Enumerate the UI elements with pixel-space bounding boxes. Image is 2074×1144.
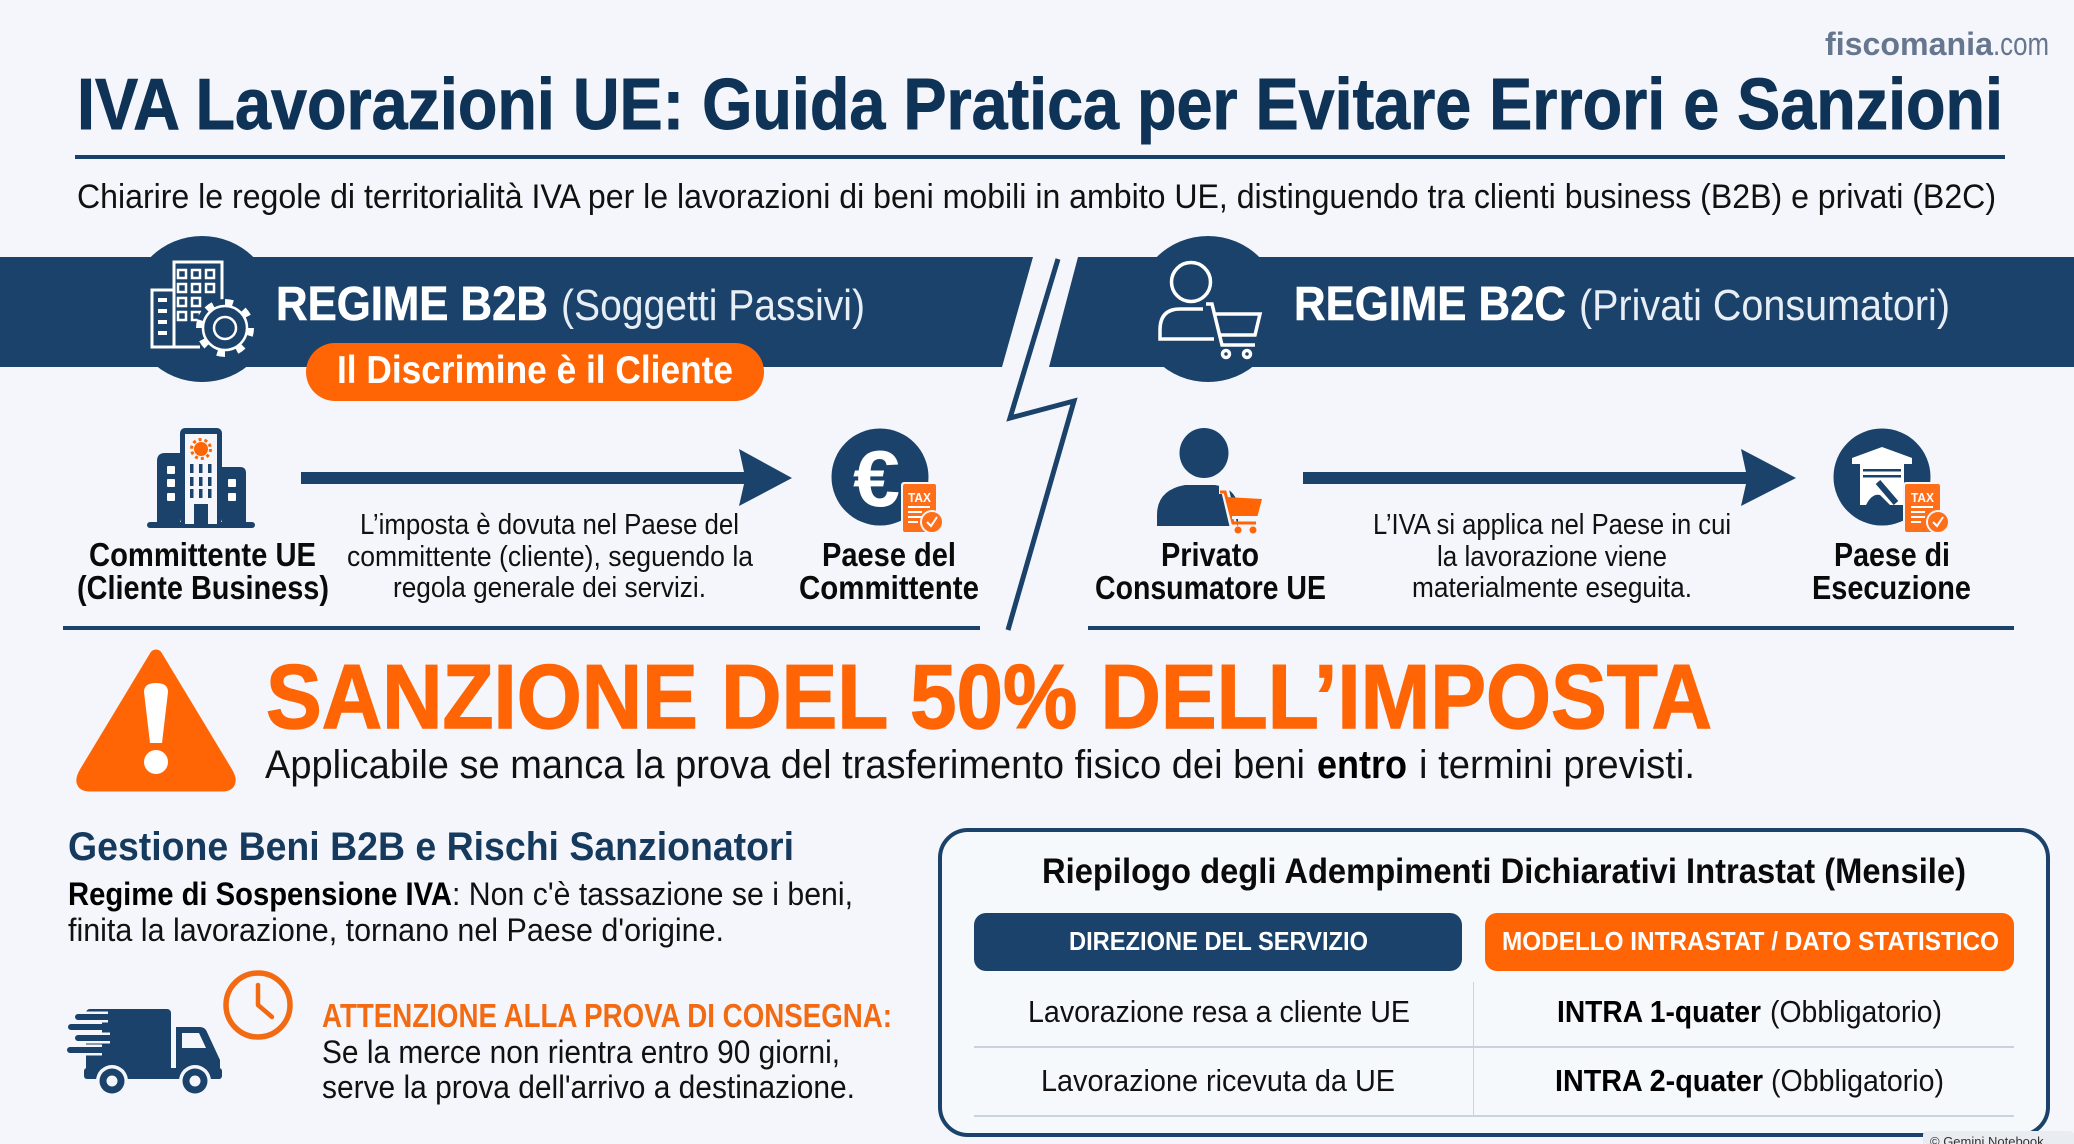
heading: Regime B2C: (Privati Consumatori)	[1579, 281, 1950, 330]
label: Privato Consumatore UE: Consumatore UE	[1095, 569, 1326, 606]
table row 2	[1041, 1063, 1944, 1098]
text: Regime di Sospensione: finita la lavorazione, tornano nel Paese d'origine.	[68, 912, 724, 948]
text: delivery warning: serve la prova dell'arrivo a destinazione.	[322, 1069, 855, 1105]
table header: direction	[974, 913, 1462, 971]
table row 1: Lavorazione resa a cliente UE	[1028, 994, 1410, 1029]
panel: Intrastat summary table	[940, 830, 2048, 1135]
icon: workshop with tax document	[1834, 428, 1949, 534]
arrow: B2C	[1303, 449, 1796, 506]
icon: warning triangle	[83, 656, 229, 785]
icon: delivery truck	[68, 1009, 222, 1097]
watermark: fiscomania.com: fiscomania	[1825, 26, 1993, 62]
heading: Regime B2C: REGIME B2C	[1294, 278, 1566, 331]
table header: direction: DIREZIONE DEL SERVIZIO	[1069, 926, 1368, 956]
icon: euro with tax document: €	[853, 434, 900, 523]
table header: model	[1485, 913, 2014, 971]
label: Privato Consumatore UE: Privato	[1161, 536, 1259, 573]
callout: Il Discrimine è il Cliente: Il Discrimine è il Cliente	[337, 349, 733, 392]
text: delivery warning: Se la merce non rientra entro 90 giorni,	[322, 1034, 840, 1070]
arrow: B2B	[301, 449, 792, 506]
table header: model: MODELLO INTRASTAT / DATO STATISTICO	[1502, 926, 1999, 956]
text: B2B rule: committente (cliente), seguendo la	[347, 541, 754, 573]
text: delivery warning	[322, 997, 892, 1105]
icon: workshop with tax document: TAX	[1911, 490, 1934, 505]
text: B2C rule: materialmente eseguita.	[1412, 572, 1692, 604]
panel: B2B banner	[0, 236, 1033, 382]
table title: Riepilogo degli Adempimenti Dichiarativi Intrastat (Mensile)	[1042, 852, 1966, 891]
heading: Regime B2B: (Soggetti Passivi)	[561, 281, 865, 330]
label: Paese di Esecuzione	[1812, 536, 1971, 606]
label: Paese del Committente	[799, 536, 979, 606]
icon: euro with tax document	[832, 428, 943, 534]
table row 1: (Obbligatorio)	[1770, 994, 1942, 1029]
text: Regime di Sospensione	[68, 876, 853, 948]
label: Paese del Committente: Committente	[799, 569, 979, 606]
text: B2C rule: L’IVA si applica nel Paese in cui	[1373, 509, 1731, 541]
icon: clock	[226, 973, 290, 1037]
text: B2B rule	[347, 509, 754, 604]
callout: Il Discrimine è il Cliente	[306, 343, 764, 401]
table row 2: (Obbligatorio)	[1771, 1063, 1944, 1098]
label: Paese di Esecuzione: Esecuzione	[1812, 569, 1971, 606]
text: B2B rule: L’imposta è dovuta nel Paese del	[360, 509, 739, 541]
text: B2C rule: la lavorazione viene	[1437, 541, 1667, 573]
icon: office building with gear	[152, 262, 254, 357]
text: Regime di Sospensione: Regime di Sospensione IVA	[68, 876, 452, 912]
table row 2: INTRA 2-quater	[1555, 1063, 1763, 1098]
heading: Regime B2C	[1294, 278, 1950, 331]
heading: Regime B2B	[276, 278, 865, 331]
label: Privato Consumatore UE	[1095, 536, 1326, 606]
icon: euro with tax document: TAX	[908, 490, 931, 505]
label: Committente UE: (Cliente Business)	[77, 569, 329, 606]
label: Committente UE: Committente UE	[89, 536, 316, 573]
heading: sanction: SANZIONE DEL 50% DELL’IMPOSTA	[266, 647, 1712, 748]
label: Paese del Committente: Paese del	[822, 536, 956, 573]
heading: Regime B2B: REGIME B2B	[276, 278, 548, 331]
subtitle: Chiarire le regole di territorialità IVA per le lavorazioni di beni mobili in ambito UE, distinguendo tra clienti business (B2B) e privati (B2C)	[77, 178, 1996, 216]
heading: Gestione Beni: Gestione Beni B2B e Rischi Sanzionatori	[68, 825, 794, 869]
badge: Gemini Notebook credit	[1923, 1131, 2074, 1144]
icon: person with cart	[1160, 262, 1260, 358]
text: Regime di Sospensione: : Non c'è tassazione se i beni,	[452, 876, 853, 912]
table row 1	[1028, 994, 1942, 1029]
text: delivery warning: ATTENZIONE ALLA PROVA DI CONSEGNA:	[322, 997, 892, 1034]
icon: client building	[147, 428, 255, 528]
icon: consumer with cart	[1157, 428, 1262, 534]
table row 2: Lavorazione ricevuta da UE	[1041, 1063, 1395, 1098]
text: B2B rule: regola generale dei servizi.	[393, 572, 706, 604]
text: sanction condition: i termini previsti.	[1419, 743, 1695, 787]
panel: B2C banner	[1049, 236, 2074, 382]
text: sanction condition: entro	[1317, 743, 1407, 787]
label: Committente UE	[77, 536, 329, 606]
text: sanction condition: Applicabile se manca la prova del trasferimento fisico dei beni	[265, 743, 1305, 787]
divider: lightning bolt	[1008, 259, 1074, 630]
table row 1: INTRA 1-quater	[1557, 994, 1761, 1029]
label: Paese di Esecuzione: Paese di	[1834, 536, 1950, 573]
watermark: fiscomania.com: .com	[1993, 26, 2049, 62]
text: B2C rule	[1373, 509, 1731, 604]
